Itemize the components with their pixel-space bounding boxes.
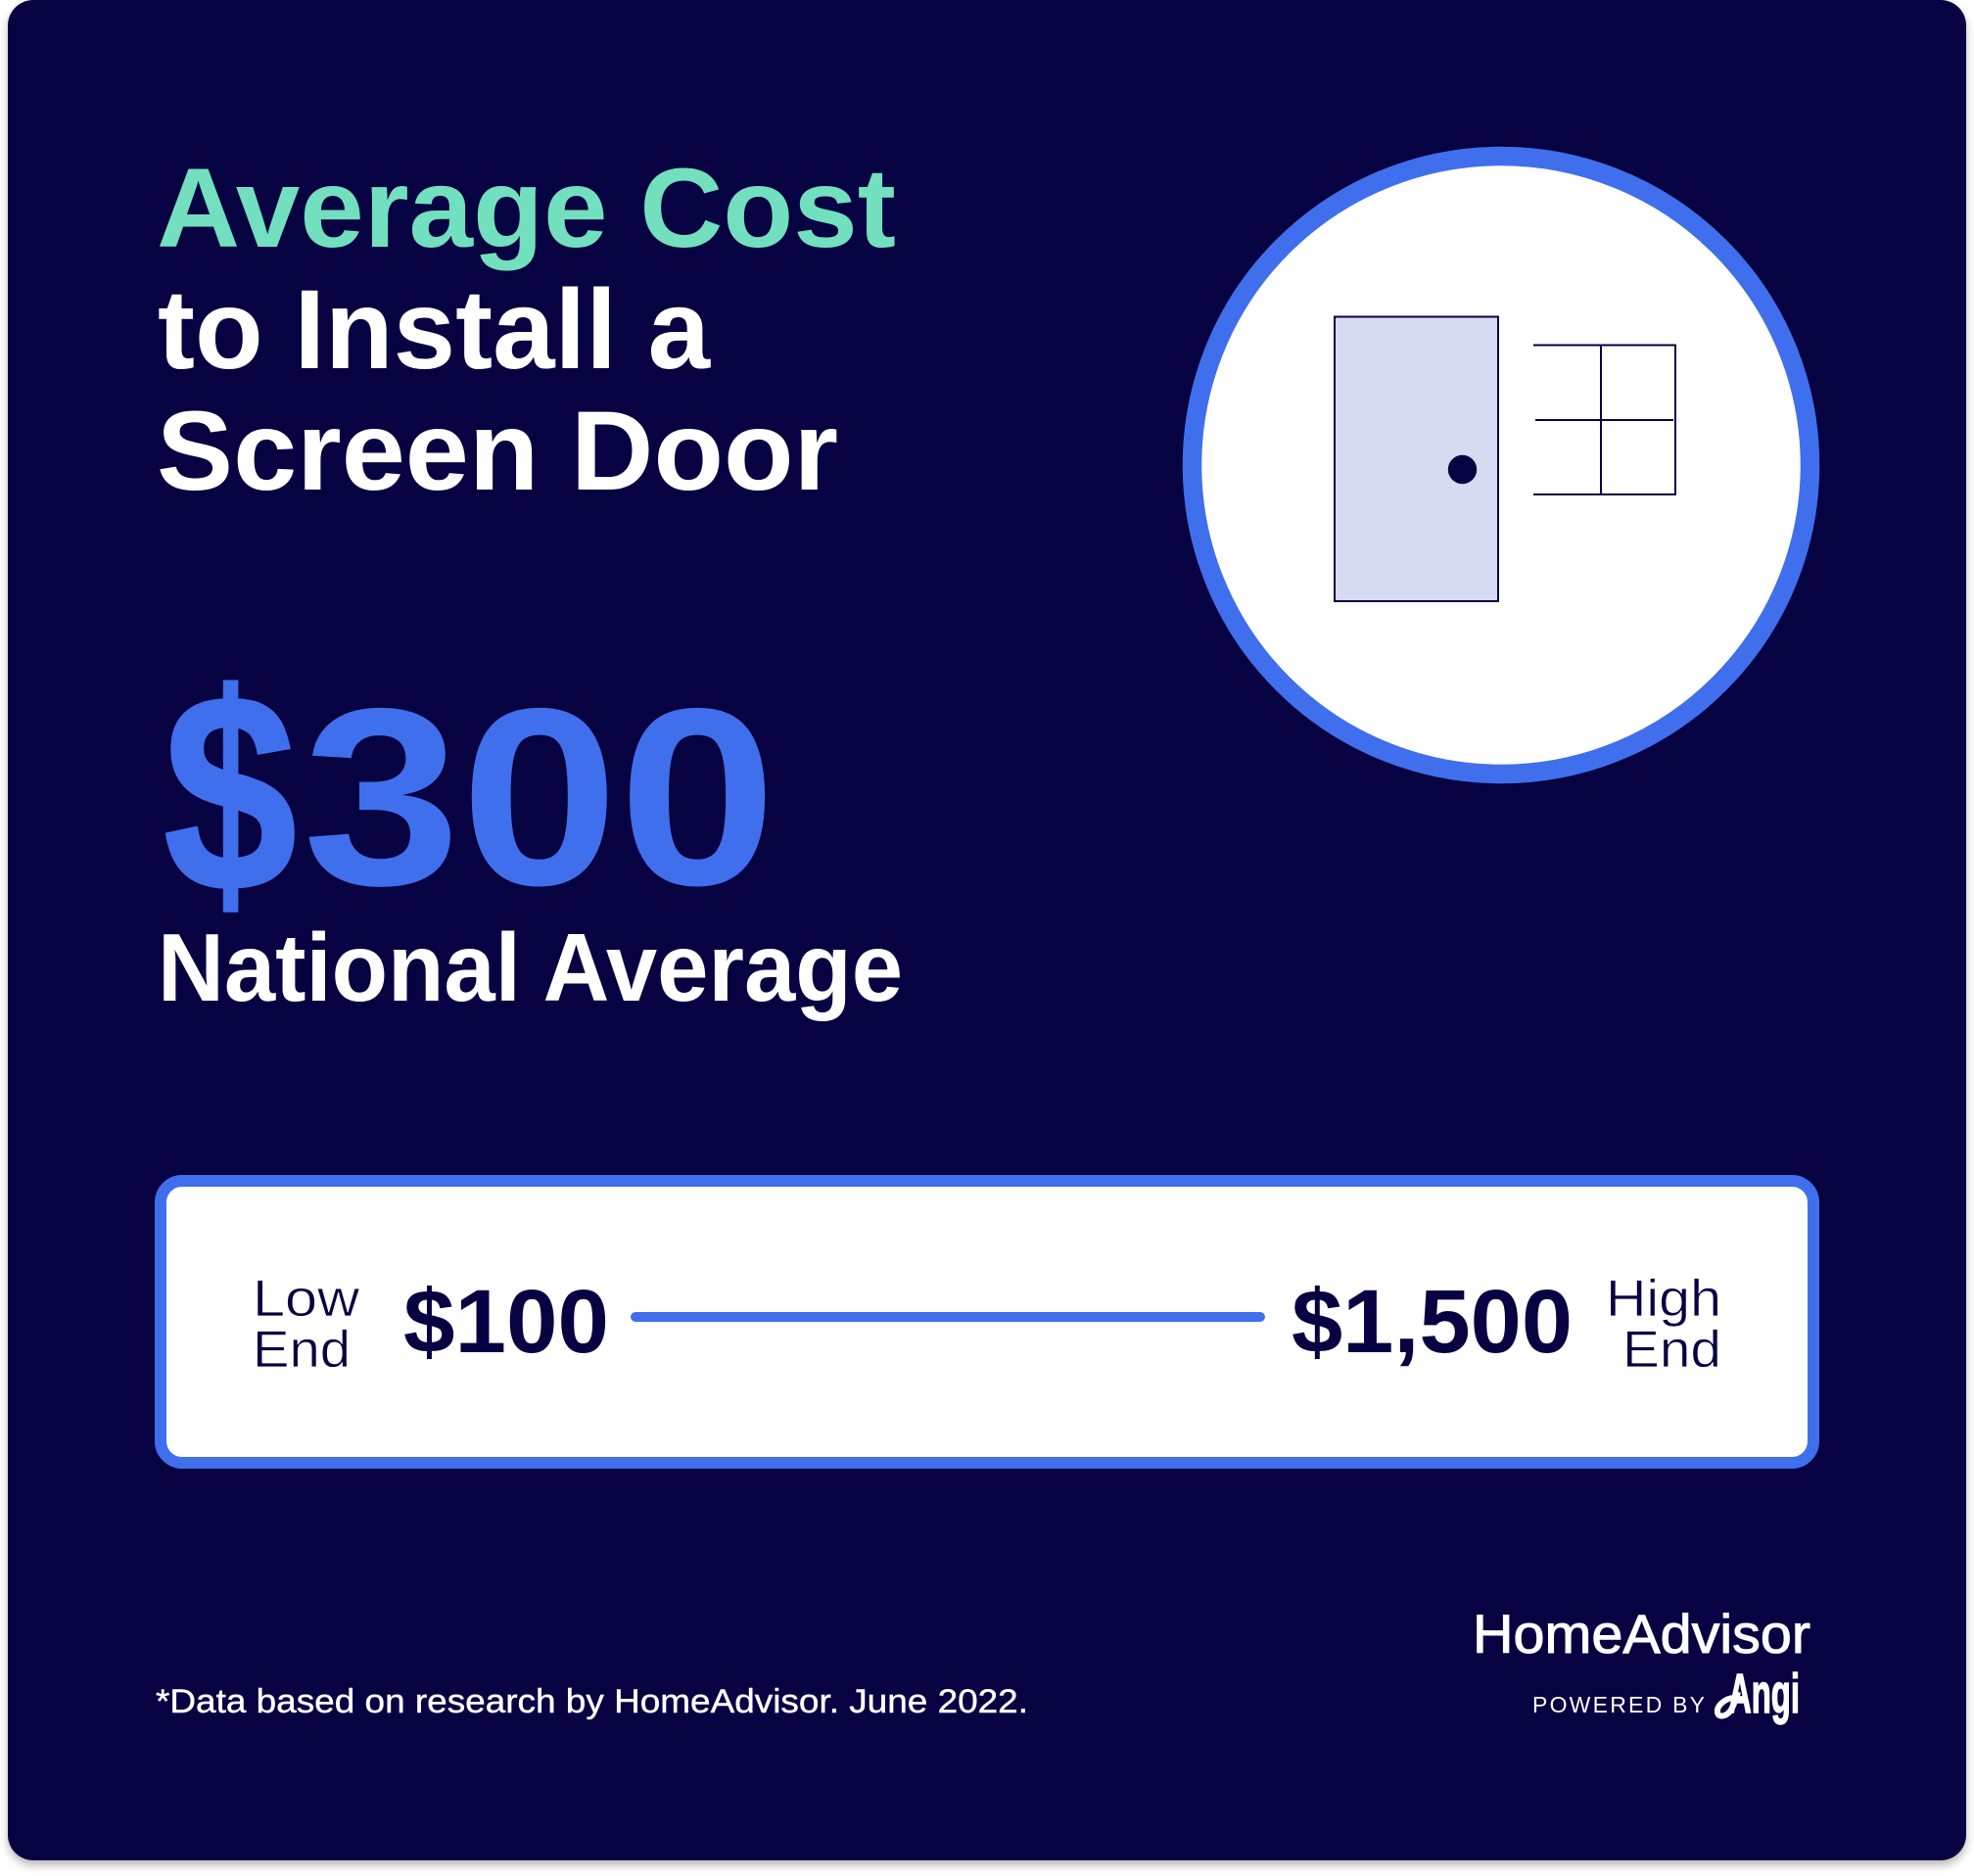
title line: Average Cost: Average Cost bbox=[157, 146, 896, 271]
dollar sign: $ bbox=[164, 635, 297, 950]
high end label: End bbox=[1622, 1321, 1721, 1379]
price digits: 300 bbox=[303, 655, 776, 938]
door bbox=[1335, 317, 1498, 601]
Angi swash bbox=[1717, 1692, 1738, 1716]
panel: cost range bbox=[161, 1181, 1813, 1463]
high end label: High bbox=[1606, 1270, 1721, 1328]
range line bbox=[631, 1312, 1265, 1322]
logo: HomeAdvisor powered by Angi bbox=[1473, 1603, 1810, 1725]
low end label: Low bbox=[253, 1270, 360, 1328]
title line: Screen Door: Screen Door bbox=[157, 389, 838, 514]
window bbox=[1533, 345, 1675, 494]
national average label: National Average bbox=[158, 914, 903, 1021]
HomeAdvisor wordmark: HomeAdvisor bbox=[1473, 1603, 1810, 1665]
circle badge bbox=[1193, 157, 1810, 774]
door knob bbox=[1448, 455, 1477, 484]
low end label bbox=[253, 1270, 360, 1379]
footnote: *Data based on research by HomeAdvisor. June 2022. bbox=[156, 1683, 1028, 1720]
powered by text: POWERED BY bbox=[1532, 1692, 1705, 1717]
range box bbox=[161, 1181, 1813, 1463]
high end price: $1,500 bbox=[1292, 1272, 1573, 1372]
low end price: $100 bbox=[403, 1272, 609, 1372]
high end label bbox=[1606, 1270, 1721, 1379]
title line: to Install a: to Install a bbox=[158, 267, 711, 393]
icon: door and window in circle bbox=[1193, 157, 1810, 774]
national average price bbox=[164, 635, 776, 950]
title bbox=[157, 146, 896, 514]
low end label: End bbox=[253, 1321, 351, 1379]
Angi wordmark: Angi bbox=[1728, 1663, 1800, 1725]
